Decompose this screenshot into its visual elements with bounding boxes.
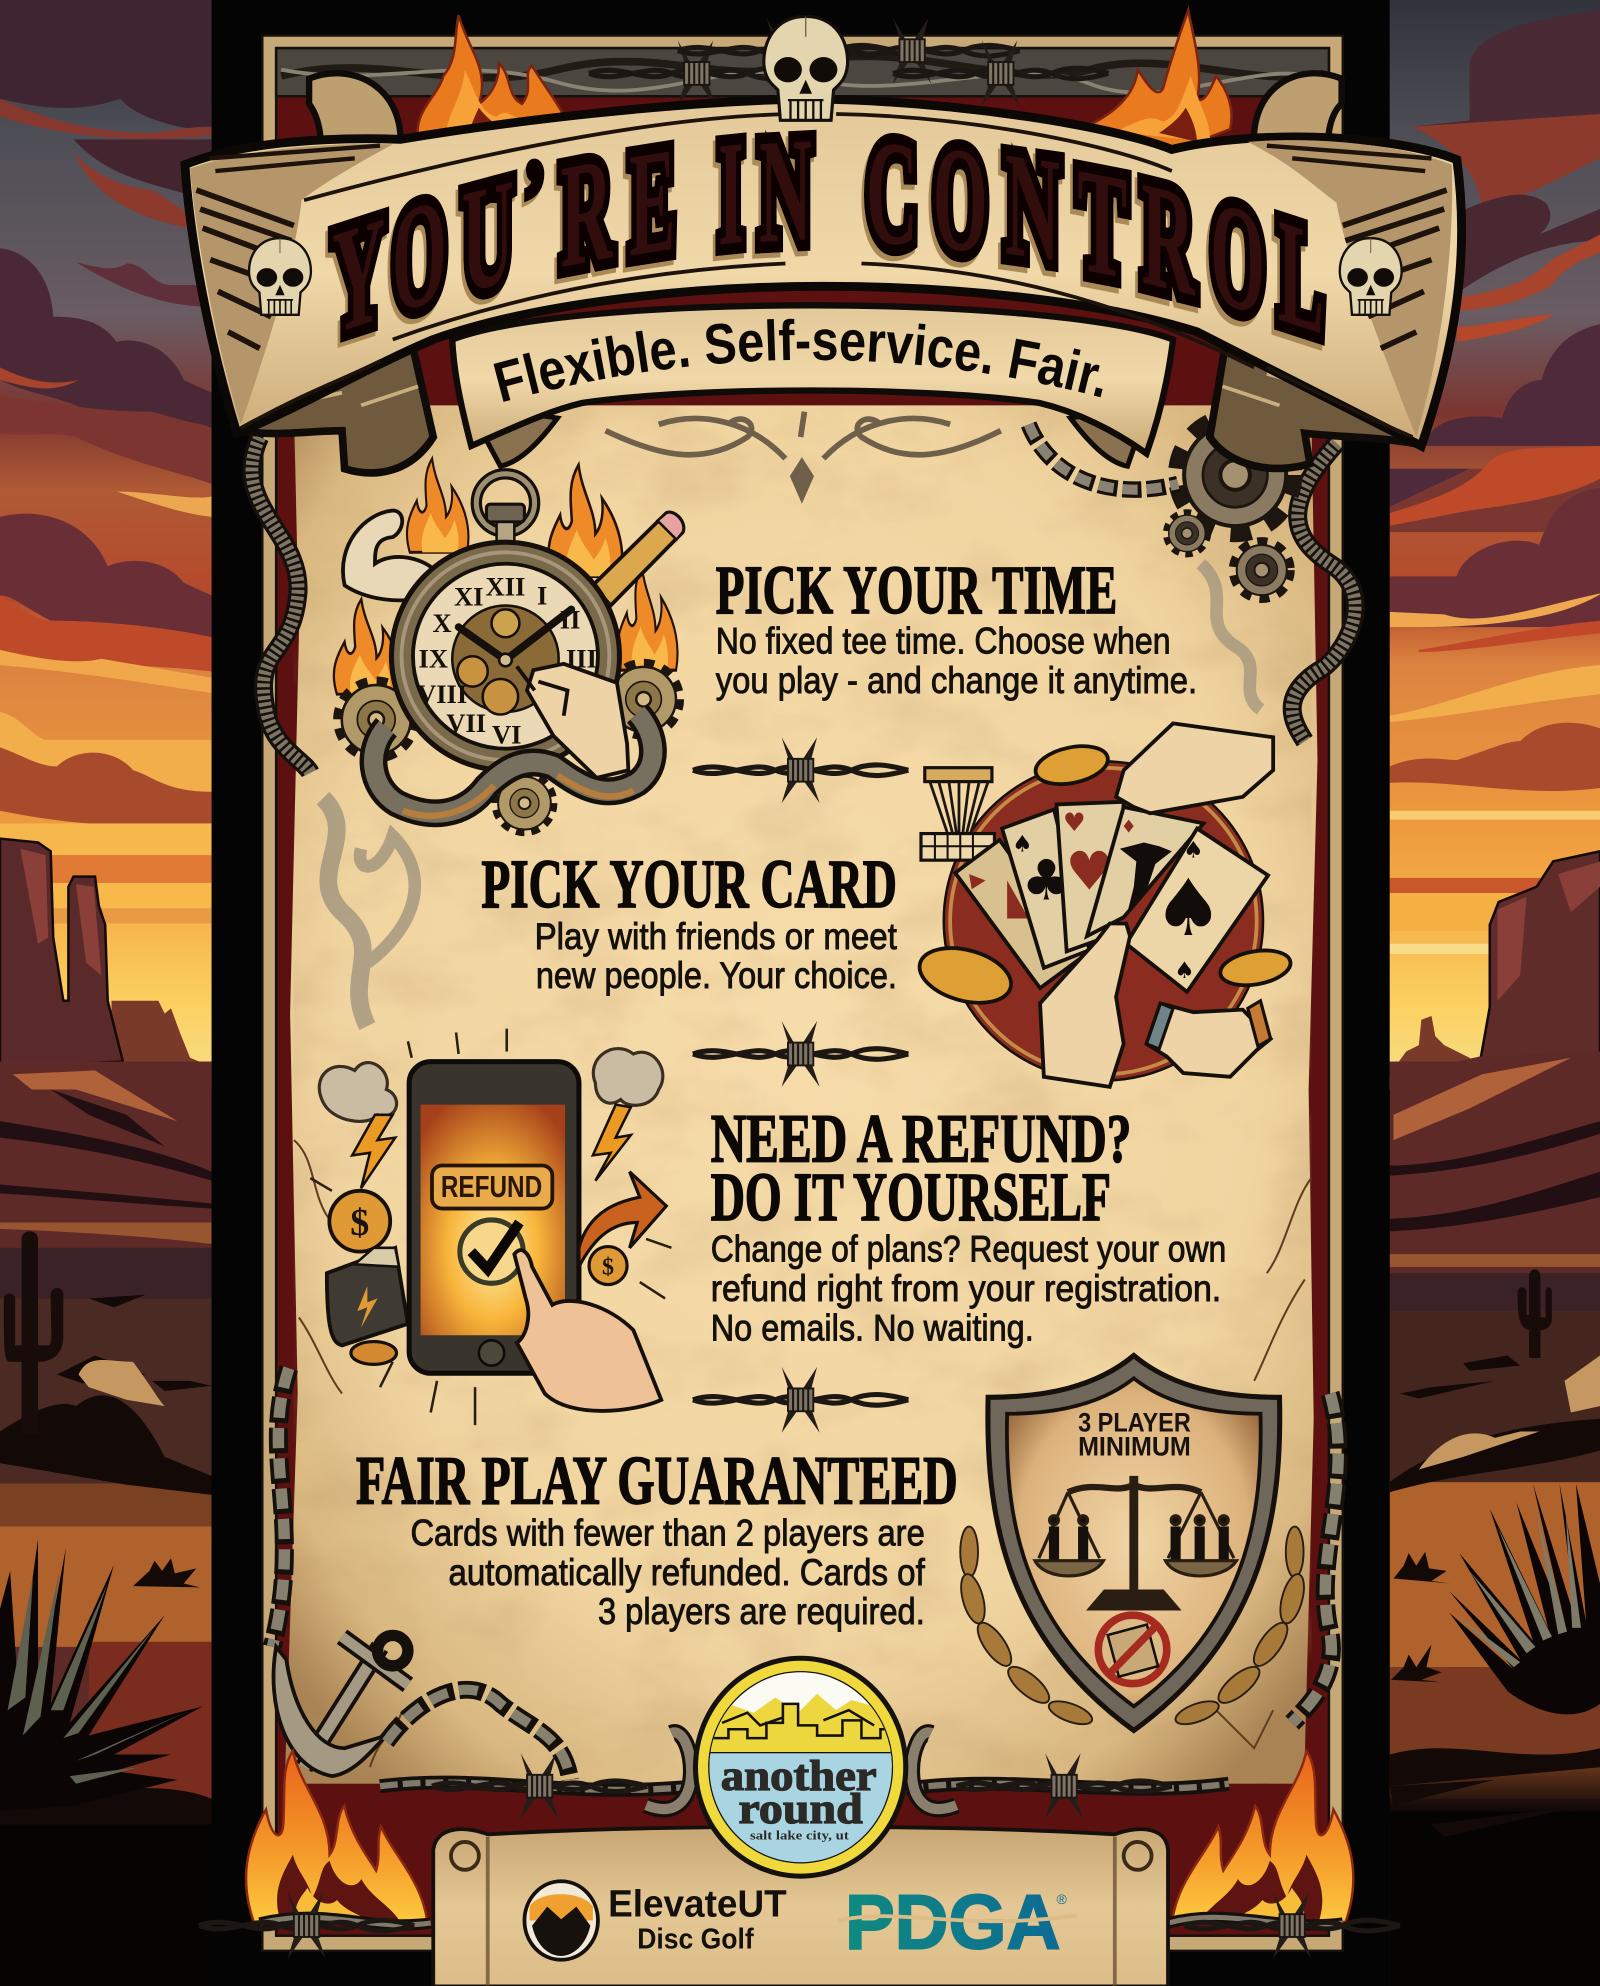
numerals: IX bbox=[418, 644, 448, 674]
check mark bbox=[460, 1220, 523, 1283]
body bbox=[410, 1513, 925, 1632]
ribbon tails shading bbox=[190, 140, 1452, 437]
discs bbox=[913, 740, 1293, 1012]
title: O bbox=[392, 165, 447, 347]
top hand bbox=[1116, 723, 1273, 813]
body: Change of plans? Request your own bbox=[711, 1229, 1226, 1270]
agave plants bbox=[0, 1483, 1600, 1812]
icon: stopwatch with flames bbox=[334, 459, 684, 831]
pencil bbox=[593, 512, 684, 606]
bursts bbox=[310, 1029, 671, 1425]
distant buttes bbox=[111, 1001, 1482, 1115]
heading: PICK YOUR CARD bbox=[481, 846, 897, 922]
section: pick your card bbox=[481, 846, 897, 996]
skull top bbox=[764, 16, 848, 120]
body: Cards with fewer than 2 players are bbox=[410, 1513, 925, 1554]
card C bbox=[1057, 802, 1124, 951]
title: ’ bbox=[523, 138, 547, 262]
smoke left bbox=[323, 798, 415, 1026]
barbed wire divider 2 bbox=[693, 1021, 908, 1087]
logo: pdga: PDGA bbox=[845, 1879, 1060, 1965]
heading: NEED A REFUND? bbox=[711, 1101, 1131, 1177]
title: I bbox=[718, 110, 744, 278]
card E: ♠ bbox=[1174, 958, 1195, 984]
coin bbox=[329, 1191, 390, 1252]
numerals: VI bbox=[492, 720, 522, 750]
title: O bbox=[1210, 168, 1265, 349]
card D: ♦ bbox=[1121, 817, 1137, 837]
heading bbox=[711, 1101, 1131, 1235]
mesas bbox=[0, 839, 123, 1067]
cacti bbox=[4, 1231, 1552, 1434]
numerals: III bbox=[566, 644, 597, 674]
card E bbox=[1126, 829, 1268, 992]
body bbox=[711, 1229, 1226, 1348]
tapping hand bbox=[514, 1250, 661, 1411]
card E: ♠ bbox=[1153, 862, 1223, 954]
lightning bbox=[352, 1115, 395, 1188]
shield text: MINIMUM bbox=[1078, 1432, 1191, 1462]
heading: PICK YOUR TIME bbox=[716, 552, 1117, 628]
numerals: VIII bbox=[417, 679, 467, 709]
left chain bbox=[272, 1368, 289, 1647]
body: refund right from your registration. bbox=[711, 1268, 1221, 1309]
left sky clouds bbox=[0, 0, 212, 924]
top flames bbox=[417, 10, 1232, 149]
subtitle ribbon bbox=[449, 302, 1176, 470]
phone screen bbox=[421, 1105, 565, 1335]
icon: cards and hands bbox=[913, 723, 1293, 1087]
section: fair play guaranteed bbox=[356, 1443, 958, 1632]
hands bbox=[459, 609, 571, 660]
logo scene bbox=[709, 1672, 892, 1862]
left snake bbox=[252, 437, 310, 773]
skull right bbox=[1340, 238, 1402, 315]
coin stack bbox=[351, 1342, 397, 1364]
frame bbox=[262, 35, 1343, 1951]
card C: ♥ bbox=[1066, 840, 1113, 902]
body: automatically refunded. Cards of bbox=[448, 1552, 925, 1593]
storm clouds bbox=[319, 1063, 397, 1121]
wallet bbox=[327, 1248, 408, 1345]
title: L bbox=[1278, 187, 1324, 367]
icon: shield bbox=[957, 1356, 1309, 1730]
barbed wire divider 3 bbox=[693, 1367, 908, 1433]
icon: refund phone bbox=[310, 1029, 671, 1425]
right chain bbox=[1292, 1394, 1338, 1723]
card B: ♠ bbox=[1012, 831, 1033, 857]
right sky clouds bbox=[1390, 10, 1600, 954]
body: No fixed tee time. Choose when bbox=[716, 621, 1171, 662]
flames bottom left bbox=[246, 1751, 427, 1922]
title: E bbox=[629, 116, 675, 289]
case and dial bbox=[391, 542, 619, 770]
smoke right bbox=[1201, 564, 1260, 709]
title: T bbox=[1077, 135, 1127, 311]
laurel bbox=[957, 1527, 1309, 1729]
scales bbox=[1035, 1476, 1236, 1609]
card C: ♥ bbox=[1063, 807, 1086, 837]
logo text: round bbox=[739, 1786, 863, 1833]
muscle arm bbox=[343, 511, 437, 600]
flames behind watch bbox=[334, 459, 678, 694]
body bbox=[535, 916, 897, 996]
title: U bbox=[462, 146, 514, 326]
bushes and rocks bbox=[0, 1295, 1600, 1837]
title: R bbox=[1142, 148, 1195, 328]
body: No emails. No waiting. bbox=[711, 1307, 1034, 1348]
logo: pdga: ® bbox=[1057, 1891, 1068, 1907]
card D bbox=[1087, 807, 1203, 936]
parchment cracks bbox=[294, 1140, 1311, 1767]
subtitle: Flexible. Self-service. Fair. bbox=[494, 318, 1103, 402]
numerals: VII bbox=[446, 708, 486, 738]
shield text: 3 PLAYER bbox=[1078, 1408, 1191, 1438]
handshake bbox=[1146, 1001, 1271, 1077]
land bbox=[0, 1062, 212, 1986]
card E: ♠ bbox=[1183, 838, 1204, 864]
heading: FAIR PLAY GUARANTEED bbox=[356, 1443, 958, 1519]
holding hand bbox=[1040, 924, 1130, 1087]
black poster panel bbox=[212, 0, 1390, 1986]
barbed top band bbox=[276, 48, 1329, 96]
bottom scroll bbox=[433, 1827, 1168, 1986]
flames bottom right bbox=[1172, 1751, 1353, 1922]
turning hand bbox=[517, 664, 628, 778]
title: Y bbox=[332, 184, 385, 367]
body: 3 players are required. bbox=[598, 1591, 925, 1632]
numerals: II bbox=[560, 604, 580, 634]
chain top right bbox=[1029, 424, 1178, 490]
refund button: REFUND bbox=[441, 1170, 542, 1204]
frame bottom wire bbox=[260, 1917, 1343, 1925]
crown bbox=[476, 474, 535, 532]
no cards sign bbox=[1098, 1615, 1167, 1684]
refund button bbox=[432, 1165, 552, 1209]
parchment bbox=[285, 405, 1317, 1789]
disc golf basket bbox=[921, 768, 994, 860]
title: R bbox=[561, 125, 613, 300]
barbed wire divider 1 bbox=[693, 737, 908, 803]
logo: another round bbox=[693, 1656, 908, 1879]
logo: elevateut: ElevateUT bbox=[608, 1884, 787, 1926]
numerals bbox=[417, 571, 597, 750]
bottom barbed wire bbox=[380, 1732, 1229, 1809]
top band barbs bbox=[589, 18, 1108, 106]
section: pick your time bbox=[716, 552, 1197, 701]
numerals: I bbox=[537, 580, 547, 610]
logo text: salt lake city, ut bbox=[750, 1828, 850, 1842]
main ribbon curls bbox=[243, 73, 1414, 473]
logo: elevateut bbox=[524, 1881, 787, 1960]
section: need a refund bbox=[711, 1101, 1226, 1348]
card B: ♣ bbox=[1021, 848, 1071, 913]
body bbox=[716, 621, 1197, 701]
ribbon pinstripes bbox=[241, 114, 1413, 437]
numerals: XII bbox=[486, 571, 525, 601]
red band at bottom bbox=[281, 1784, 1324, 1860]
phone bbox=[409, 1062, 579, 1373]
right snake bbox=[1292, 443, 1355, 741]
numerals: X bbox=[433, 608, 452, 638]
skull left bbox=[249, 238, 311, 315]
logo: elevateut: Disc Golf bbox=[637, 1923, 754, 1955]
anchor chain bbox=[386, 1690, 570, 1780]
body: Play with friends or meet bbox=[535, 916, 897, 957]
small gears bbox=[340, 683, 412, 756]
snake around watch bbox=[373, 713, 653, 816]
icon: refund phone: $ bbox=[602, 1254, 614, 1280]
land streaks bbox=[0, 1058, 1600, 1986]
main ribbon bbox=[185, 99, 1462, 446]
red disc bbox=[944, 761, 1263, 1081]
title: N bbox=[759, 107, 812, 275]
title: N bbox=[1005, 120, 1060, 294]
logo text: another bbox=[721, 1753, 877, 1800]
arrow bbox=[579, 1172, 666, 1267]
clock works bbox=[452, 606, 559, 712]
title: C bbox=[866, 111, 918, 277]
ornament flourish bbox=[606, 412, 1001, 497]
small coin bbox=[589, 1247, 627, 1285]
heading: DO IT YOURSELF bbox=[711, 1159, 1111, 1235]
body: new people. Your choice. bbox=[536, 955, 897, 996]
body: you play - and change it anytime. bbox=[716, 660, 1197, 701]
title bbox=[332, 107, 1324, 367]
shield body bbox=[988, 1356, 1280, 1730]
gears top right bbox=[1168, 421, 1289, 596]
card A bbox=[955, 840, 1083, 988]
anchor bbox=[274, 1635, 408, 1776]
card B bbox=[1002, 810, 1089, 968]
title: O bbox=[933, 115, 988, 285]
shield text bbox=[1078, 1408, 1191, 1462]
icon: refund phone: $ bbox=[350, 1202, 369, 1244]
numerals: XI bbox=[454, 582, 484, 612]
logo text bbox=[721, 1753, 877, 1842]
